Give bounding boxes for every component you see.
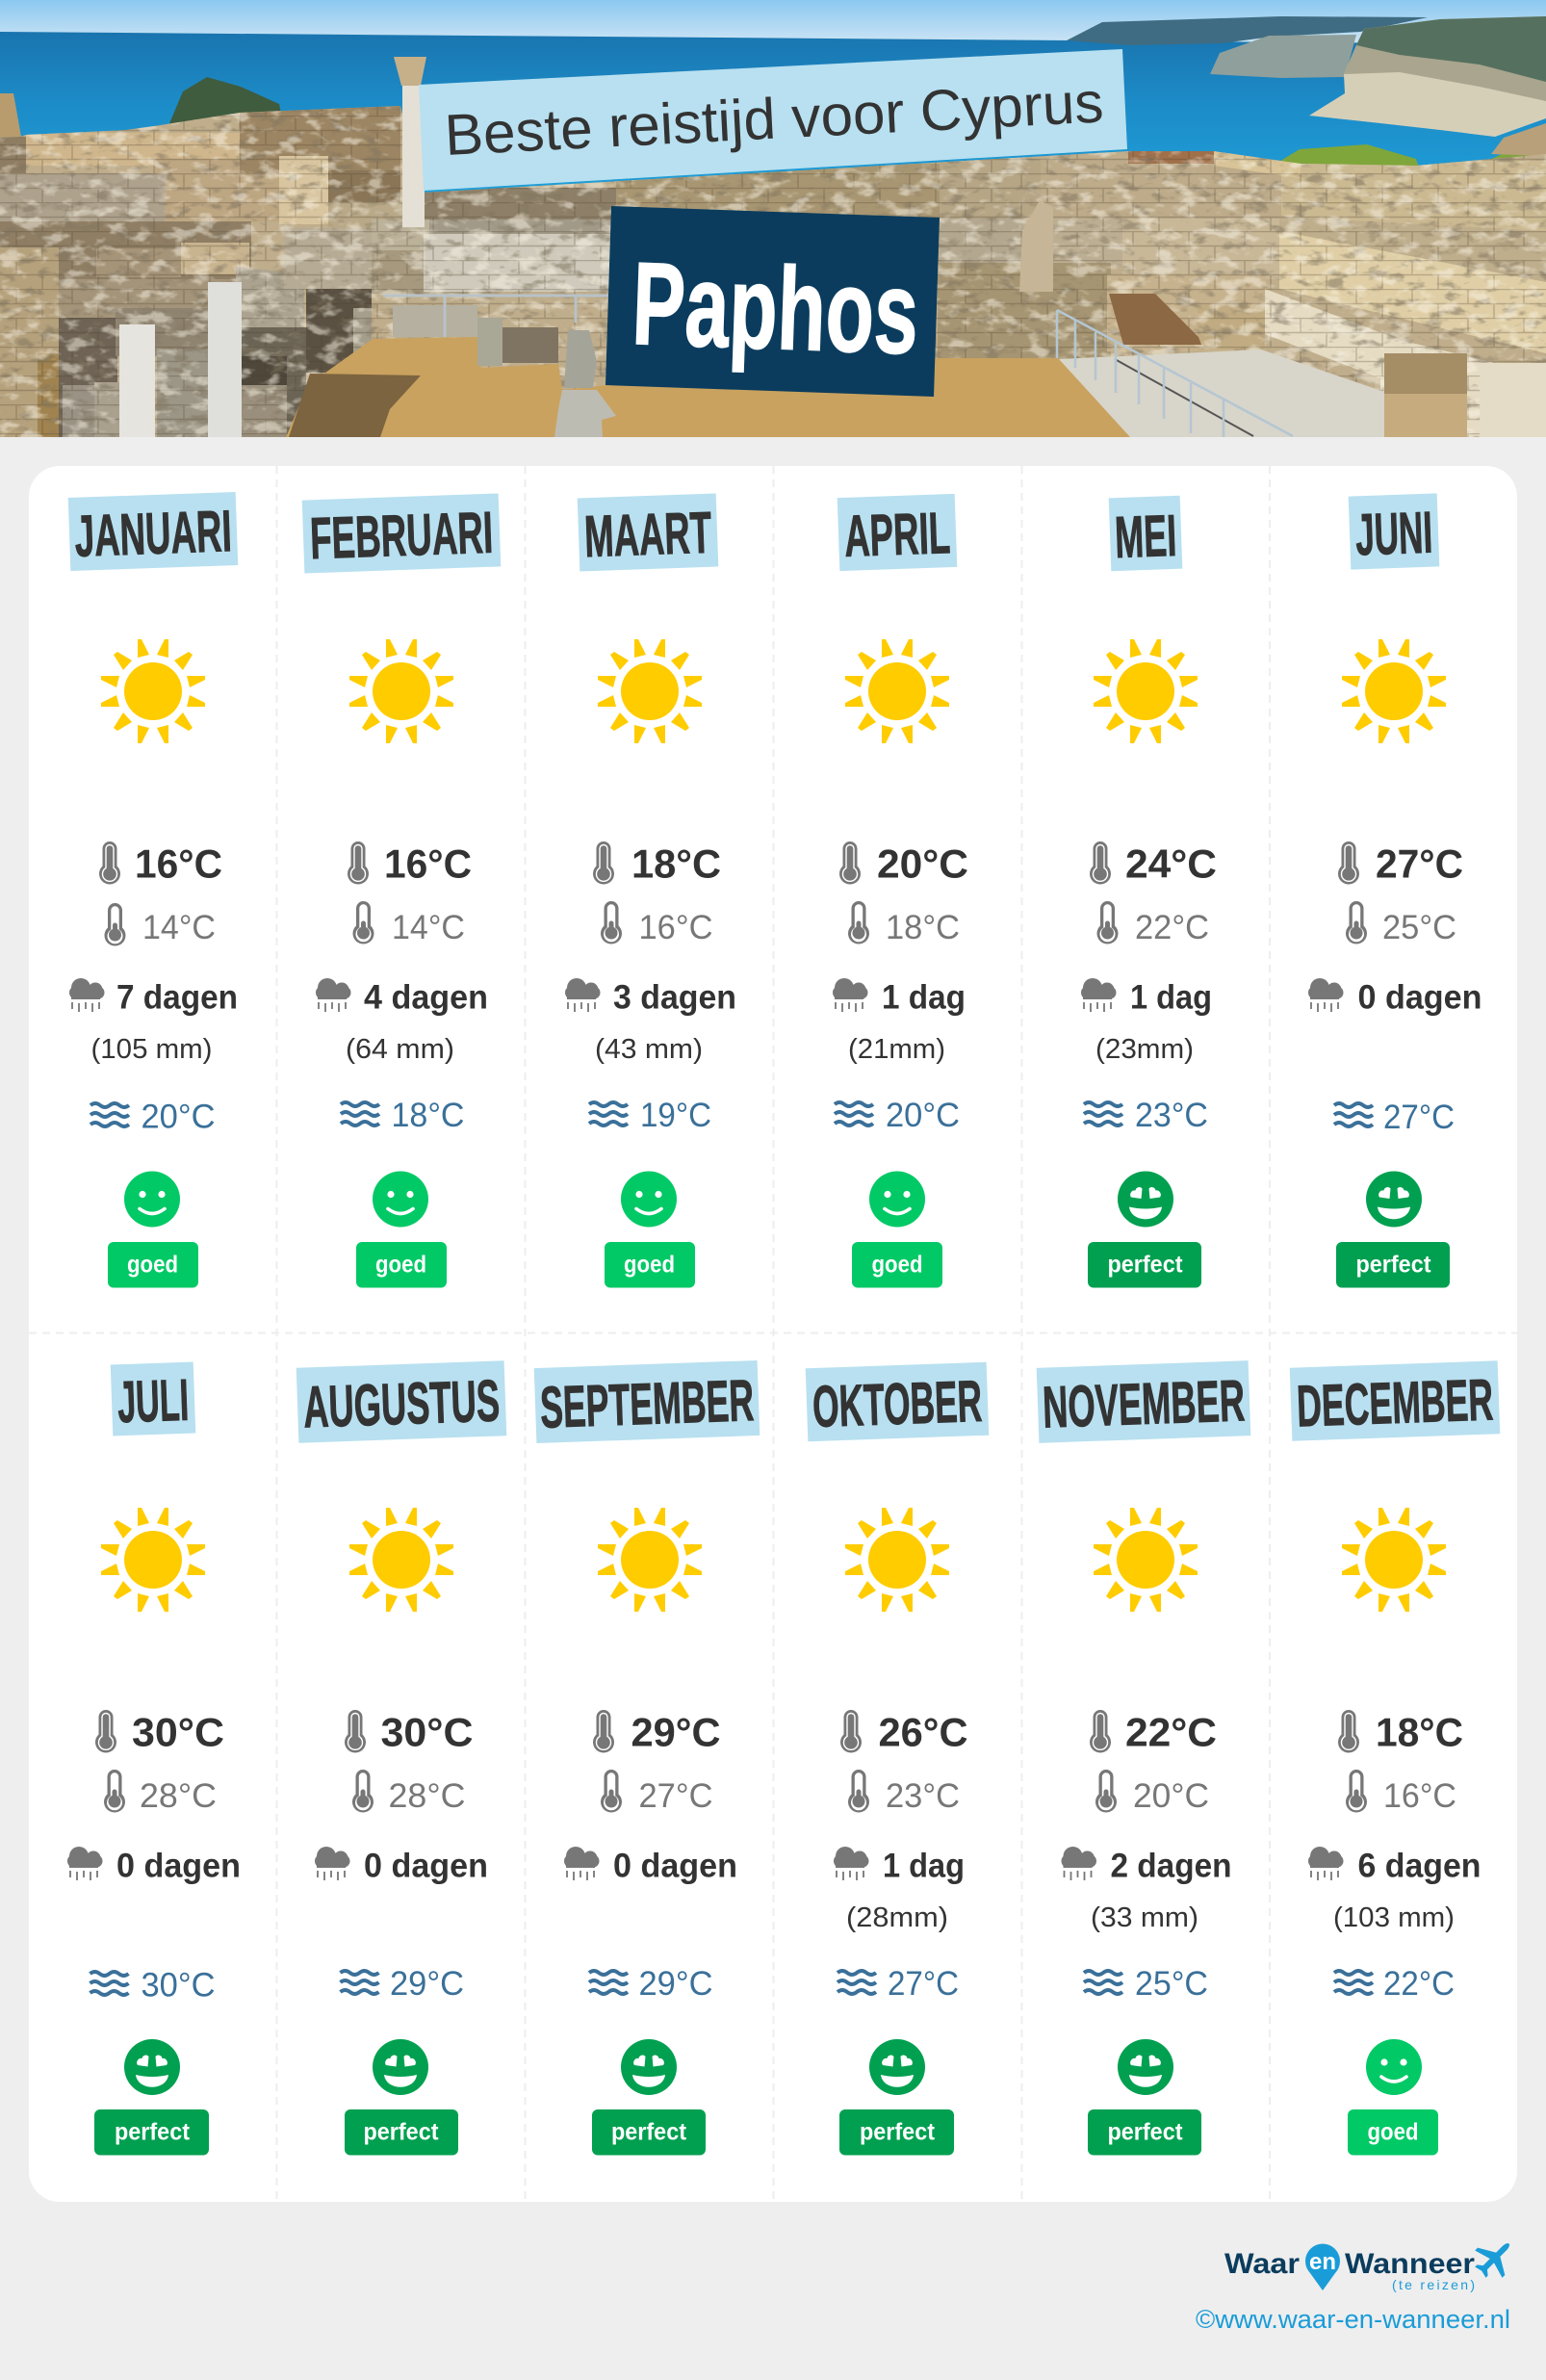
month label: JULI: [116, 1367, 190, 1435]
rain days: 1 dag: [883, 1847, 965, 1885]
icon: sun: [349, 639, 453, 743]
icon: sun: [1094, 639, 1198, 743]
sea temperature: [589, 1097, 711, 1134]
logo: Waar en Wanneer: [1224, 2230, 1523, 2292]
rating: perfect: [839, 2039, 954, 2155]
sea temperature: 23°C: [1135, 1097, 1208, 1134]
rating: perfect: perfect: [1107, 2118, 1183, 2145]
rating: goed: goed: [624, 1252, 675, 1279]
month label: [68, 492, 238, 571]
rain days: [316, 978, 488, 1017]
low temperature: 27°C: [639, 1777, 712, 1815]
month label: [302, 493, 501, 574]
month label: OKTOBER: [812, 1368, 983, 1439]
high temperature: 18°C: [1376, 1710, 1463, 1754]
rain days: 3 dagen: [613, 978, 736, 1017]
icon: sun: [598, 639, 702, 743]
sea temperature: 27°C: [888, 1965, 959, 2003]
month label: SEPTEMBER: [539, 1367, 755, 1440]
low temperature: 25°C: [1382, 909, 1456, 946]
rating: perfect: perfect: [115, 2118, 191, 2145]
sea temperature: [589, 1965, 712, 2003]
high temperature: 24°C: [1125, 841, 1217, 886]
month label: [296, 1360, 506, 1443]
sea temperature: 20°C: [141, 1098, 216, 1136]
rainfall: (103 mm): [1333, 1902, 1455, 1933]
icon: sun: [845, 639, 949, 743]
panel: juni: [1308, 493, 1482, 1288]
sea temperature: [90, 1098, 216, 1136]
panel: maart: [565, 494, 736, 1288]
rain days: 0 dagen: [364, 1847, 488, 1885]
sea temperature: 19°C: [640, 1097, 711, 1134]
low temperature: [352, 1770, 466, 1815]
sea temperature: 29°C: [639, 1965, 712, 2003]
sea temperature: [1084, 1097, 1208, 1134]
high temperature: 30°C: [132, 1710, 224, 1754]
sea temperature: [90, 1966, 216, 2005]
rain days: [1061, 1847, 1232, 1885]
low temperature: [601, 1770, 712, 1815]
rain days: [1081, 978, 1212, 1017]
rain days: 0 dagen: [1357, 978, 1482, 1017]
month label: [111, 1362, 195, 1436]
title banner: [419, 49, 1127, 191]
rating: perfect: perfect: [1355, 1252, 1431, 1279]
header photo: ruins of Kourion by the sea: [0, 0, 1546, 437]
low temperature: 16°C: [1383, 1777, 1456, 1815]
rainfall: (21mm): [848, 1034, 945, 1065]
city banner: [606, 206, 940, 397]
month label: [578, 494, 718, 571]
rain days: [834, 1847, 965, 1885]
low temperature: 14°C: [142, 909, 216, 946]
high temperature: [593, 1710, 720, 1754]
low temperature: [848, 901, 960, 946]
high temperature: 20°C: [877, 841, 968, 886]
month label: [534, 1360, 760, 1443]
high temperature: 18°C: [631, 841, 721, 886]
low temperature: 18°C: [886, 909, 960, 946]
rainfall: (28mm): [846, 1902, 948, 1933]
high temperature: [1338, 1710, 1463, 1754]
icon: sun: [598, 1508, 702, 1612]
low temperature: [352, 901, 465, 946]
panel: april: [833, 494, 968, 1288]
sea temperature: 27°C: [1383, 1099, 1455, 1136]
rating: goed: goed: [127, 1252, 178, 1279]
low temperature: [1346, 1770, 1456, 1815]
rating: perfect: [1088, 1171, 1201, 1288]
rainfall: (43 mm): [595, 1034, 703, 1065]
icon: sun: [1094, 1508, 1198, 1612]
sea temperature: 22°C: [1383, 1965, 1455, 2003]
rating: goed: [108, 1171, 198, 1288]
rating: perfect: perfect: [1107, 1252, 1183, 1279]
low temperature: 28°C: [140, 1777, 217, 1815]
low temperature: 16°C: [639, 909, 712, 946]
logo: Waar en Wanneer: Waar: [1224, 2248, 1300, 2280]
rating: goed: goed: [375, 1252, 426, 1279]
low temperature: [1346, 901, 1456, 946]
rain days: [67, 1847, 241, 1885]
title text: Beste reistijd voor Cyprus: [443, 69, 1105, 168]
month label: JANUARI: [73, 498, 233, 569]
sea temperature: 29°C: [390, 1965, 464, 2003]
city name: Paphos: [631, 238, 920, 378]
sea temperature: [1334, 1965, 1455, 2003]
low temperature: 14°C: [392, 909, 465, 946]
low temperature: [1095, 1770, 1209, 1815]
rain days: [315, 1847, 488, 1885]
rain days: 4 dagen: [364, 978, 488, 1017]
panel: februari: [302, 493, 501, 1288]
rain days: 6 dagen: [1357, 1847, 1481, 1885]
low temperature: [601, 901, 712, 946]
icon: sun: [101, 639, 205, 743]
low temperature: 28°C: [389, 1777, 466, 1815]
rainfall: (64 mm): [346, 1034, 454, 1065]
rating: goed: goed: [1367, 2118, 1419, 2145]
logo: Waar en Wanneer: (te reizen): [1392, 2277, 1475, 2292]
sea temperature: 25°C: [1135, 1965, 1208, 2003]
rainfall: (23mm): [1095, 1034, 1194, 1065]
rain days: 0 dagen: [613, 1847, 737, 1885]
rain days: [833, 978, 966, 1017]
high temperature: 27°C: [1376, 841, 1463, 886]
rain days: [1308, 978, 1482, 1017]
month label: [1037, 1360, 1250, 1443]
rating: perfect: perfect: [860, 2118, 936, 2145]
sea temperature: 20°C: [886, 1097, 960, 1134]
high temperature: 30°C: [381, 1710, 474, 1754]
month label: AUGUSTUS: [302, 1367, 501, 1440]
month label: MAART: [583, 500, 712, 569]
low temperature: [1097, 901, 1209, 946]
sea temperature: [1084, 1965, 1208, 2003]
logo: Waar en Wanneer: en: [1309, 2249, 1336, 2275]
panel: augustus: [296, 1360, 506, 2155]
month label: [806, 1362, 989, 1441]
rain days: [1308, 1847, 1481, 1885]
panel: mei: [1081, 496, 1217, 1288]
website credit: ©www.waar-en-wanneer.nl: [1196, 2305, 1510, 2334]
low temperature: 23°C: [886, 1777, 960, 1815]
low temperature: 22°C: [1135, 909, 1209, 946]
sea temperature: [835, 1097, 960, 1134]
rain days: 2 dagen: [1111, 1847, 1232, 1885]
high temperature: 16°C: [384, 841, 472, 886]
icon: sun: [349, 1508, 453, 1612]
rainfall: (105 mm): [90, 1034, 212, 1065]
rain days: [564, 1847, 737, 1885]
month label: FEBRUARI: [309, 500, 494, 571]
high temperature: 22°C: [1125, 1710, 1217, 1754]
rain days: 0 dagen: [116, 1847, 241, 1885]
icon: airplane: [1467, 2230, 1523, 2286]
month label: NOVEMBER: [1042, 1367, 1246, 1440]
high temperature: [99, 841, 222, 886]
rating: goed: goed: [872, 1252, 922, 1279]
panel: januari: [68, 492, 238, 1288]
sea temperature: [1334, 1099, 1455, 1136]
rainfall: (33 mm): [1091, 1902, 1198, 1933]
sea temperature: 30°C: [141, 1966, 216, 2005]
rain days: 7 dagen: [116, 978, 238, 1017]
month label: [1109, 496, 1182, 571]
panel: december: [1290, 1360, 1500, 2155]
rating: perfect: [592, 2039, 706, 2155]
rating: perfect: [1088, 2039, 1201, 2155]
rating: goed: [356, 1171, 447, 1288]
panel: november: [1037, 1360, 1250, 2155]
sea temperature: [341, 1097, 464, 1134]
rating: goed: [605, 1171, 695, 1288]
panel: monthly climate card: [29, 466, 1517, 2202]
low temperature: 20°C: [1133, 1777, 1209, 1815]
panel: juli: [67, 1362, 241, 2155]
rain days: [565, 978, 736, 1017]
high temperature: 29°C: [631, 1710, 720, 1754]
month label: APRIL: [843, 500, 951, 569]
rain days: 1 dag: [882, 978, 966, 1017]
month label: [1349, 493, 1439, 570]
low temperature: [104, 1770, 217, 1815]
rating: perfect: [94, 2039, 209, 2155]
logo: Waar en Wanneer: Wanneer: [1345, 2248, 1475, 2280]
high temperature: 16°C: [135, 841, 222, 886]
icon: sun: [101, 1508, 205, 1612]
sea temperature: [341, 1965, 464, 2003]
icon: map pin: [1305, 2244, 1340, 2290]
rating: goed: [852, 1171, 942, 1288]
rain days: 1 dag: [1130, 978, 1212, 1017]
high temperature: [593, 841, 721, 886]
low temperature: [848, 1770, 960, 1815]
rating: perfect: [345, 2039, 458, 2155]
sea temperature: 18°C: [391, 1097, 464, 1134]
rating: goed: [1348, 2039, 1438, 2155]
low temperature: [104, 903, 216, 946]
high temperature: [1338, 841, 1463, 886]
month label: [837, 494, 957, 571]
high temperature: [348, 841, 472, 886]
icon: sun: [1342, 639, 1446, 743]
icon: sun: [1342, 1508, 1446, 1612]
panel: september: [534, 1360, 760, 2155]
high temperature: 26°C: [878, 1710, 968, 1754]
icon: sun: [845, 1508, 949, 1612]
rating: perfect: perfect: [611, 2118, 687, 2145]
month label: JUNI: [1354, 500, 1433, 567]
month label: MEI: [1114, 503, 1177, 570]
high temperature: [840, 1710, 968, 1754]
rain days: [69, 978, 238, 1017]
rating: perfect: [1336, 1171, 1450, 1288]
rating: perfect: perfect: [364, 2118, 439, 2145]
sea temperature: [837, 1965, 959, 2003]
panel: oktober: [806, 1362, 989, 2155]
